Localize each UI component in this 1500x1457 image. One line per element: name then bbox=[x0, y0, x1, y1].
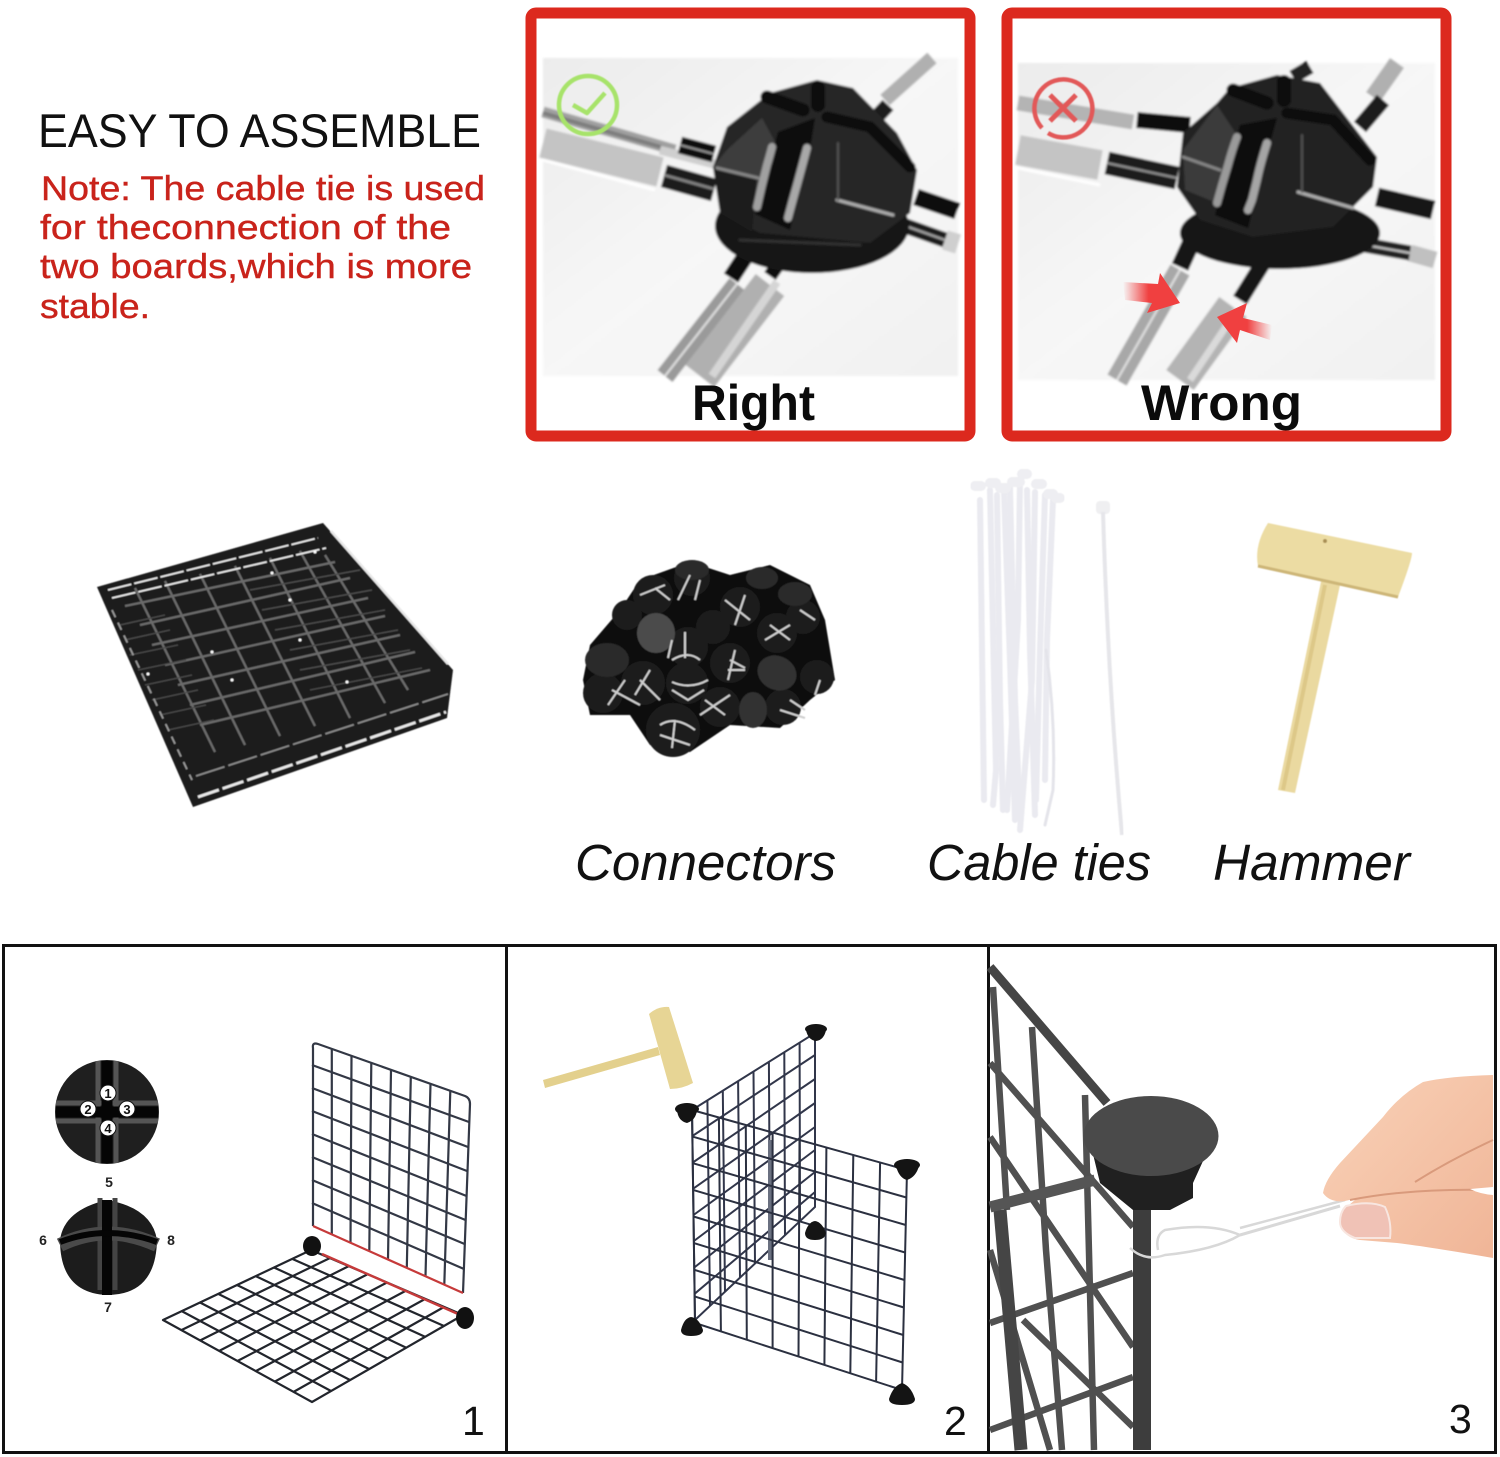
arrow: right red bbox=[1217, 303, 1272, 343]
step number 2: 2 bbox=[944, 1398, 967, 1444]
note text: Note: The cable tie is used bbox=[41, 170, 485, 208]
connector diagram bottom: 5 bbox=[105, 1174, 113, 1190]
photo: correct connector bbox=[543, 58, 958, 376]
labels: accessories: Cable ties bbox=[927, 834, 1151, 891]
cable tie loop bbox=[1130, 1200, 1345, 1257]
labels: accessories: Connectors bbox=[575, 834, 836, 891]
floor grid bbox=[163, 1250, 463, 1402]
note text: for theconnection of the bbox=[40, 209, 451, 247]
arrow: left red bbox=[1123, 273, 1180, 313]
step number 3: 3 bbox=[1449, 1396, 1472, 1442]
connector diagram top bbox=[55, 1060, 159, 1164]
fingernail bbox=[1340, 1203, 1390, 1238]
photo: incorrect connector bbox=[1018, 63, 1435, 380]
label: Right: Right bbox=[692, 375, 815, 431]
note text: two boards,which is more bbox=[40, 248, 472, 286]
connector diagram top: 4 bbox=[104, 1121, 112, 1136]
panel: right way bbox=[531, 13, 970, 436]
step number 1: 1 bbox=[462, 1398, 485, 1444]
connector diagram bottom: 6 bbox=[39, 1232, 47, 1248]
back grid bbox=[692, 1033, 815, 1320]
cluster of connectors bbox=[583, 560, 835, 757]
cable ties bbox=[975, 474, 1060, 830]
note text bbox=[40, 170, 485, 326]
connector diagram bottom: 7 bbox=[104, 1299, 112, 1315]
hammer bbox=[1257, 523, 1412, 793]
icon: cross bbox=[1034, 79, 1092, 137]
wall grid bbox=[312, 1044, 470, 1293]
wire grid photo bbox=[990, 967, 1142, 1450]
panel: wrong way bbox=[1007, 13, 1446, 436]
hammer bbox=[543, 1007, 693, 1089]
note text: stable. bbox=[40, 288, 150, 326]
connector diagram top: 1 bbox=[104, 1086, 112, 1101]
title: EASY TO ASSEMBLE bbox=[38, 104, 481, 157]
connector bbox=[1180, 197, 1380, 269]
connector diagram bottom bbox=[39, 1174, 175, 1315]
connector diagram top: 3 bbox=[123, 1102, 131, 1117]
connector diagram bottom: 8 bbox=[167, 1232, 175, 1248]
connector diagram top: 2 bbox=[84, 1102, 92, 1117]
hand bbox=[1323, 1075, 1493, 1258]
connector caps bbox=[303, 1236, 474, 1329]
connector bbox=[715, 179, 909, 273]
labels: accessories bbox=[575, 834, 1412, 891]
connector bbox=[1084, 1096, 1218, 1210]
panel: step 1 bbox=[4, 946, 506, 1452]
front grid bbox=[692, 1110, 907, 1390]
label: Wrong: Wrong bbox=[1141, 375, 1302, 431]
panel: step 2 bbox=[506, 946, 988, 1452]
panel: step 3 bbox=[988, 946, 1496, 1452]
connector caps bbox=[675, 1024, 920, 1405]
labels: accessories: Hammer bbox=[1213, 834, 1412, 891]
photo: stack of wire panels bbox=[97, 523, 453, 807]
icon: check bbox=[559, 76, 617, 134]
single cable tie bbox=[1096, 501, 1122, 835]
